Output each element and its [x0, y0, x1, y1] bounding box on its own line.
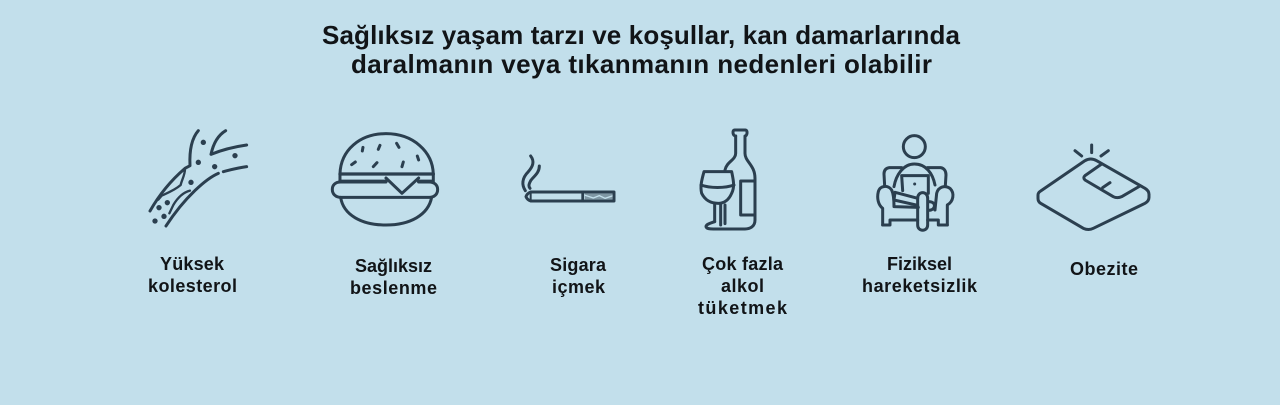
label: Sigara içmek: içmek: [552, 277, 606, 297]
label: Çok fazla alkol tüketmek: [698, 254, 788, 318]
label: Fiziksel hareketsizlik: Fiziksel: [887, 254, 952, 274]
label: Fiziksel hareketsizlik: [862, 254, 978, 296]
label: Çok fazla alkol tüketmek: alkol: [721, 276, 764, 296]
label: Sağlıksız beslenme: beslenme: [350, 278, 437, 298]
title: [322, 20, 961, 79]
icon: hamburger: [332, 134, 438, 225]
label: Çok fazla alkol tüketmek: tüketmek: [698, 298, 788, 318]
icon: artery with cholesterol: [150, 131, 247, 226]
title: daralmanın veya tıkanmanın nedenleri olabilir: [351, 49, 932, 79]
label: Sigara içmek: Sigara: [550, 255, 607, 275]
label: Yüksek kolesterol: kolesterol: [148, 276, 237, 296]
label: Yüksek kolesterol: Yüksek: [160, 254, 225, 274]
label: Çok fazla alkol tüketmek: Çok fazla: [702, 254, 784, 274]
label: Sağlıksız beslenme: [350, 256, 437, 298]
icon: cigarette: [523, 156, 614, 201]
title: Sağlıksız yaşam tarzı ve koşullar, kan damarlarında: [322, 20, 961, 50]
label: Sağlıksız beslenme: Sağlıksız: [355, 256, 432, 276]
label: Obezite: Obezite: [1070, 259, 1138, 279]
label: Yüksek kolesterol: [148, 254, 237, 296]
icon: person sitting in armchair with laptop: [878, 136, 953, 230]
icon: weighing scale: [1038, 145, 1149, 229]
icon: wine bottle and glass: [701, 130, 755, 229]
label: Sigara içmek: [550, 255, 607, 297]
label: Fiziksel hareketsizlik: hareketsizlik: [862, 276, 978, 296]
